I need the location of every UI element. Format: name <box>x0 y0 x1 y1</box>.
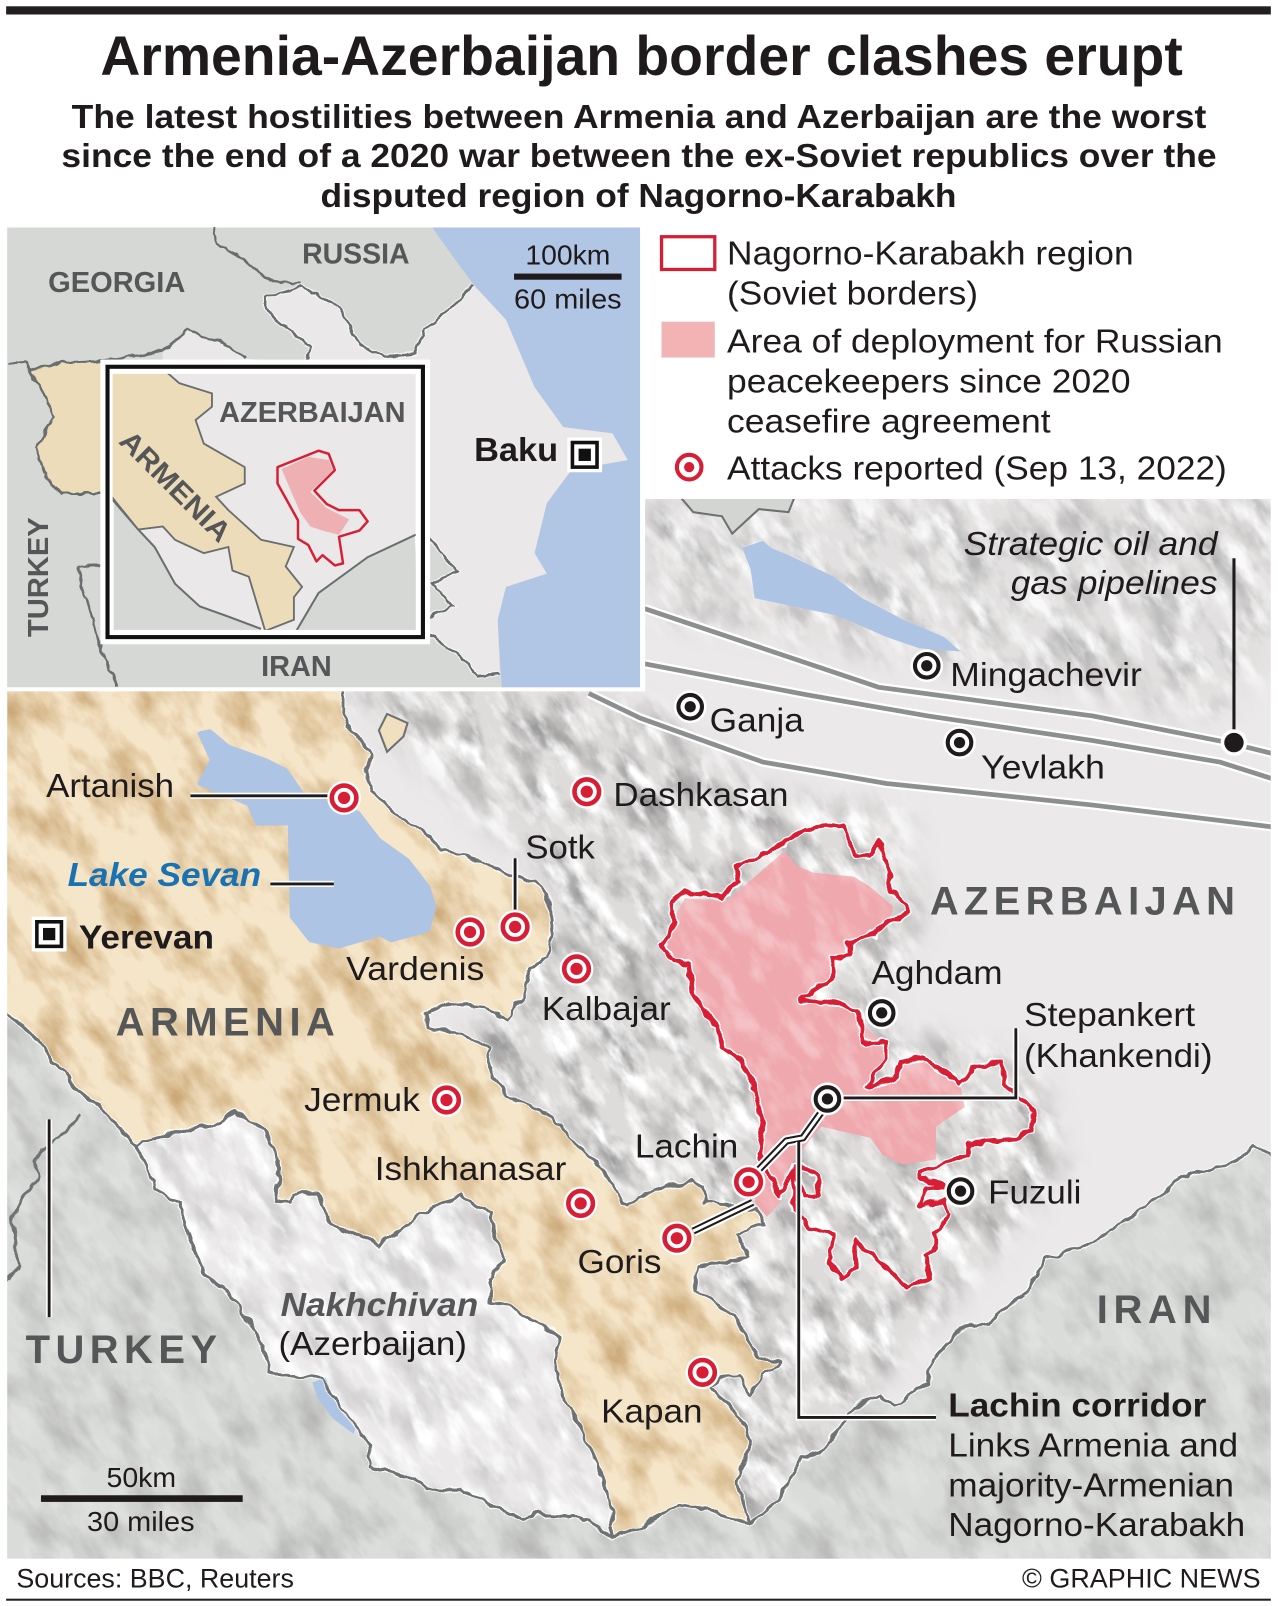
Lachin corridor road <box>693 1112 821 1231</box>
country labels on main map: TURKEY <box>26 1328 217 1372</box>
country labels in inset: TURKEY <box>23 517 55 637</box>
place labels: Artanish <box>46 767 174 805</box>
legend: peacekeeper area: peacekeepers since 2020 <box>727 362 1131 400</box>
Yerevan capital marker and label: Yerevan <box>79 918 214 956</box>
attack markers <box>327 775 765 1389</box>
place labels: (Azerbaijan) <box>279 1325 467 1363</box>
place labels: Lachin <box>635 1127 738 1165</box>
Turkey and Iran <box>7 1016 1271 1559</box>
place labels: Ishkhanasar <box>375 1150 566 1188</box>
country labels in inset: GEORGIA <box>48 267 185 299</box>
Nagorno-Karabakh outline <box>663 825 1034 1287</box>
country labels on main map: IRAN <box>1097 1288 1211 1332</box>
bottom rule <box>6 1599 1271 1601</box>
place labels: Mingachevir <box>950 656 1142 694</box>
Lake Sevan <box>200 731 434 946</box>
top rule <box>6 6 1271 14</box>
legend: attacks: Attacks reported (Sep 13, 2022) <box>727 449 1227 487</box>
subtitle: disputed region of Nagorno-Karabakh <box>321 177 956 215</box>
inset borders <box>8 227 500 687</box>
place labels: Kalbajar <box>542 990 671 1028</box>
pipeline callout <box>964 525 1247 756</box>
Armenia in locator <box>108 369 302 631</box>
locator frame <box>100 360 430 644</box>
neighbouring countries background <box>7 227 640 687</box>
sea <box>432 227 640 687</box>
Georgia corner <box>680 498 795 536</box>
place labels <box>46 656 1212 1431</box>
place labels: Nakhchivan <box>281 1286 478 1324</box>
legend: peacekeeper area: Area of deployment for Russian <box>727 322 1223 360</box>
Azerbaijan base <box>344 499 1271 1403</box>
legend: peacekeeper area <box>662 322 1223 440</box>
place labels: Ganja <box>710 701 804 739</box>
place labels: Yevlakh <box>981 748 1105 786</box>
place labels: Jermuk <box>304 1081 420 1119</box>
place labels: Aghdam <box>871 954 1003 992</box>
small Arpachay lake <box>312 1377 355 1434</box>
Lachin corridor note <box>948 1386 1245 1544</box>
credit: © GRAPHIC NEWS <box>1022 1563 1261 1593</box>
place labels: (Khankendi) <box>1024 1037 1212 1075</box>
Karabakh peacekeeper area small <box>282 457 349 535</box>
place labels: Lake Sevan <box>68 856 261 894</box>
Yerevan capital marker and label <box>32 917 214 956</box>
leader lines <box>49 796 1016 1417</box>
Nakhchivan <box>140 1116 610 1531</box>
Armenia <box>7 691 779 1534</box>
legend: Nagorno-Karabakh outline: (Soviet borders) <box>727 274 978 312</box>
Azerbaijan region <box>163 285 628 676</box>
Lachin corridor note: majority-Armenian <box>948 1466 1234 1504</box>
title: Armenia-Azerbaijan border clashes erupt <box>100 25 1183 87</box>
sources: Sources: BBC, Reuters <box>16 1563 294 1593</box>
country labels on main map: ARMENIA <box>116 1000 335 1044</box>
pipelines <box>589 608 1278 828</box>
Lachin corridor note: Nagorno-Karabakh <box>948 1506 1245 1544</box>
place labels: Dashkasan <box>613 776 789 814</box>
subtitle: since the end of a 2020 war between the ex-Soviet republics over the <box>61 137 1217 175</box>
country labels on main map <box>26 880 1235 1372</box>
country labels in inset: AZERBAIJAN <box>219 397 406 429</box>
main scale bar <box>41 1462 243 1537</box>
place labels: Goris <box>578 1243 662 1281</box>
main scale bar: 50km <box>106 1462 176 1493</box>
Armenia left part <box>29 361 113 494</box>
Lachin corridor note: Links Armenia and <box>948 1426 1238 1464</box>
panel: locator inset map <box>7 227 640 687</box>
peacekeeper deployment area <box>666 851 965 1216</box>
Mingachevir reservoir <box>742 541 961 651</box>
place labels: Stepankert <box>1024 996 1196 1034</box>
inset scale bar <box>514 239 622 314</box>
country labels in inset: RUSSIA <box>302 238 410 270</box>
legend: Nagorno-Karabakh outline <box>662 234 1134 312</box>
place labels: Kapan <box>601 1393 702 1431</box>
place labels: Vardenis <box>346 950 484 988</box>
Lachin corridor note: Lachin corridor <box>948 1386 1206 1424</box>
borders <box>0 684 1278 1567</box>
place labels: Fuzuli <box>988 1173 1081 1211</box>
inset scale bar: 100km <box>525 239 610 270</box>
country labels in inset: ARMENIA <box>113 425 237 549</box>
Nagorno-Karabakh outline small <box>278 451 368 565</box>
Azerbaijan relief <box>345 499 1271 1520</box>
subtitle: The latest hostilities between Armenia and Azerbaijan are the worst <box>72 98 1206 136</box>
Baku label and capital marker: Baku <box>474 431 558 469</box>
country labels on main map: AZERBAIJAN <box>930 880 1235 924</box>
pipeline callout: gas pipelines <box>1011 564 1218 602</box>
Baku label and capital marker <box>474 431 602 472</box>
city markers <box>674 649 977 1207</box>
country labels in inset <box>23 238 410 683</box>
legend <box>662 234 1227 487</box>
panel: main map <box>0 492 1278 1567</box>
main scale bar: 30 miles <box>87 1506 195 1537</box>
Armenian exclave <box>379 714 408 752</box>
pipeline callout: Strategic oil and <box>964 525 1219 563</box>
legend: peacekeeper area: ceasefire agreement <box>727 402 1051 440</box>
subtitle <box>61 98 1217 215</box>
country labels in inset: IRAN <box>261 651 332 683</box>
place labels: Sotk <box>525 828 595 866</box>
inset scale bar: 60 miles <box>514 283 622 314</box>
legend: Nagorno-Karabakh outline: Nagorno-Karabakh region <box>727 234 1134 272</box>
